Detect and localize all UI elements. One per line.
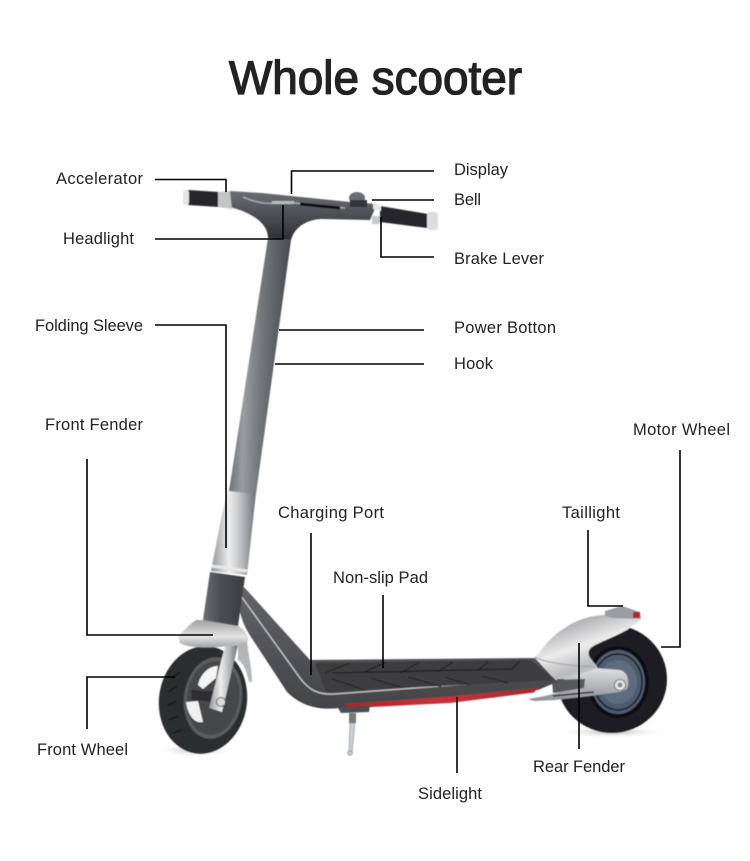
labels: Sidelight [418,785,482,803]
labels: Charging Port [278,504,384,522]
labels: Motor Wheel [633,421,730,439]
bell [349,192,367,207]
illustration: electric scooter [152,190,668,760]
stem [229,238,291,494]
labels: Accelerator [56,170,144,188]
labels: Headlight [63,230,134,248]
labels: Front Fender [45,416,144,434]
labels: Folding Sleeve [35,317,143,335]
front fender and fork [178,620,252,712]
sidelight [343,688,538,708]
right grip [372,203,438,230]
labels: Power Botton [454,319,556,337]
frame and deck body [238,587,557,709]
labels [35,161,730,803]
ground shadows [157,726,668,757]
leader lines [87,171,680,773]
left grip [183,190,232,209]
taillight [605,606,641,619]
swing arm [528,667,628,701]
labels: Display [454,161,509,179]
labels: Hook [454,355,494,373]
non-slip deck pad [315,660,556,692]
labels: Non-slip Pad [333,569,428,587]
title: Whole scooter [229,51,522,104]
rear fender [527,615,641,679]
labels: Bell [454,191,481,209]
front wheel [152,640,254,760]
folding sleeve [211,490,256,575]
labels: Brake Lever [454,250,544,268]
handlebar [183,190,438,240]
labels: Front Wheel [37,741,128,759]
labels: Rear Fender [533,758,626,776]
kickstand [338,705,370,755]
labels: Taillight [562,504,620,522]
steering head [203,572,245,626]
rear wheel [557,625,667,733]
